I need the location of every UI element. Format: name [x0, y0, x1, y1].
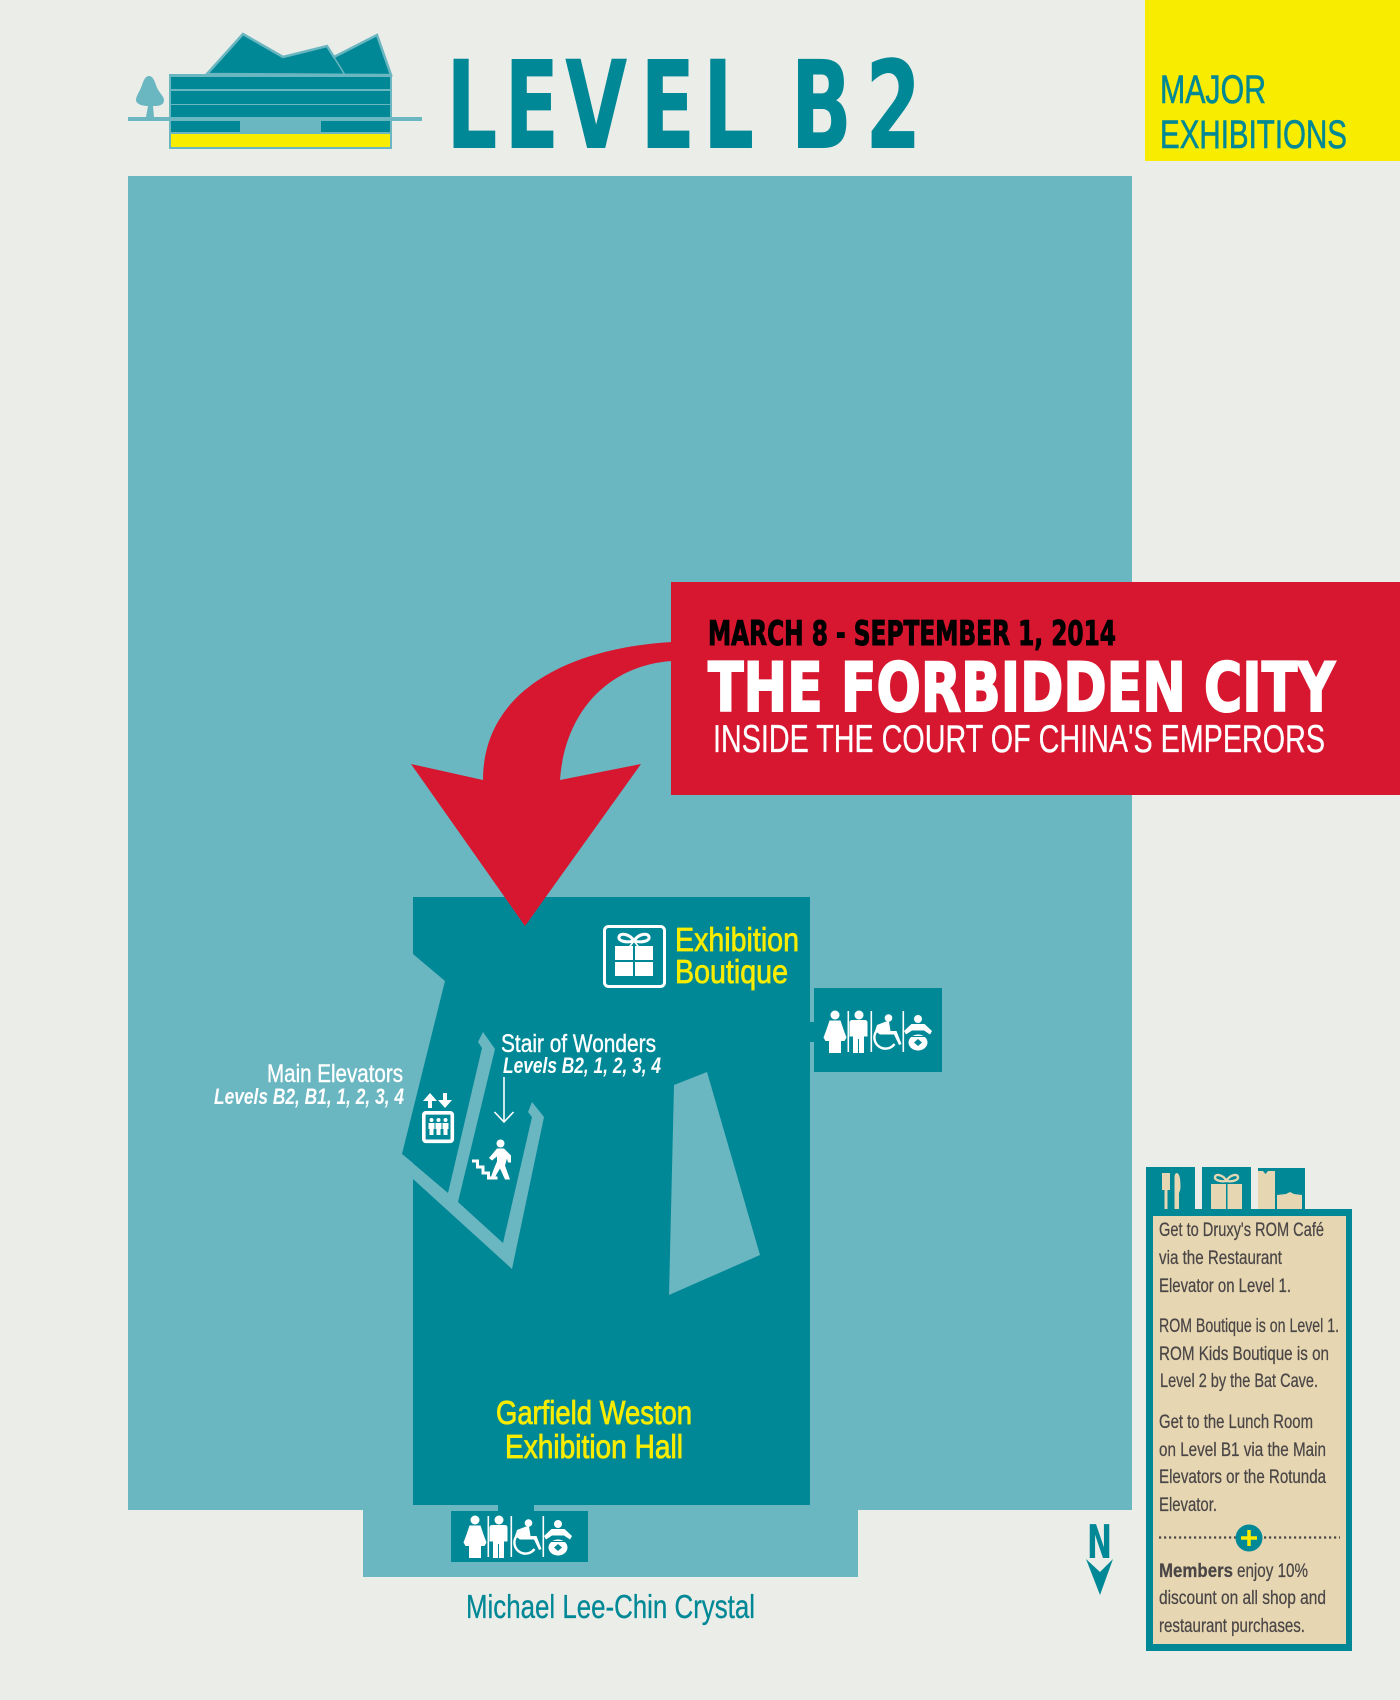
title: LEVEL B2: [446, 36, 921, 178]
label: michael lee-chin crystal: Michael Lee-Chin Crystal: [466, 1588, 755, 1625]
label: stair of wonders: Levels B2, 1, 2, 3, 4: [503, 1053, 661, 1078]
stair wall band: [402, 1032, 544, 1269]
panel: museum floor area: [128, 176, 1132, 1577]
icon: washrooms south: [451, 1511, 588, 1562]
label: stair of wonders: [501, 1030, 661, 1078]
heading: exhibition boutique: Exhibition: [675, 921, 799, 958]
callout: exhibition title: MARCH 8 - SEPTEMBER 1, 2014: [708, 614, 1116, 654]
panel: major exhibitions tag: [1145, 0, 1400, 161]
text: lunch room: Elevator.: [1159, 1495, 1217, 1516]
text: boutique: [1159, 1316, 1339, 1392]
heading: exhibition boutique: [675, 921, 799, 990]
icon: north arrow: [1086, 1515, 1113, 1595]
text: boutique: Level 2 by the Bat Cave.: [1160, 1371, 1318, 1392]
text: lunch room: [1159, 1412, 1326, 1516]
tab: shop: [1202, 1167, 1251, 1211]
label: main elevators: [214, 1060, 404, 1109]
text: members: enjoy 10%: [1237, 1561, 1308, 1582]
text: lunch room: on Level B1 via the Main: [1159, 1440, 1326, 1461]
label: garfield weston exhibition hall: Garfield Weston: [496, 1394, 692, 1431]
label: main elevators: Main Elevators: [267, 1060, 403, 1088]
icon: north arrow: N: [1087, 1515, 1112, 1569]
icon: washrooms east: [814, 988, 942, 1072]
text: members: [1159, 1561, 1326, 1637]
text: cafe: via the Restaurant: [1159, 1248, 1283, 1269]
text: members: Members: [1159, 1561, 1233, 1582]
label: stair of wonders: Stair of Wonders: [501, 1030, 656, 1058]
callout: exhibition title: [671, 582, 1400, 795]
panel: exhibition hall floor plan: [402, 897, 816, 1512]
tab: restaurant: [1146, 1167, 1195, 1211]
panel: major exhibitions tag: MAJOR: [1160, 68, 1266, 112]
panel: visitor information: [1146, 1167, 1352, 1651]
arrow: red curved pointer: [411, 642, 672, 926]
text: members: restaurant purchases.: [1159, 1616, 1305, 1637]
heading: exhibition boutique: Boutique: [675, 953, 788, 990]
text: cafe: [1159, 1220, 1324, 1297]
label: garfield weston exhibition hall: Exhibition Hall: [505, 1428, 683, 1465]
text: cafe: Get to Druxy's ROM Café: [1159, 1220, 1324, 1241]
atrium void: [669, 1072, 760, 1295]
text: members: discount on all shop and: [1159, 1588, 1326, 1609]
building icon: [128, 34, 422, 149]
text: boutique: ROM Boutique is on Level 1.: [1159, 1316, 1339, 1337]
icon: elevator: [423, 1093, 452, 1141]
divider with plus: [1159, 1524, 1340, 1552]
label: main elevators: Levels B2, B1, 1, 2, 3, 4: [214, 1084, 404, 1109]
text: lunch room: Get to the Lunch Room: [1159, 1412, 1313, 1433]
arrow: down to stair: [494, 1077, 514, 1122]
tab: lunch room: [1258, 1168, 1305, 1211]
text: boutique: ROM Kids Boutique is on: [1159, 1344, 1329, 1365]
icon: stair walker: [472, 1140, 511, 1180]
icon: gift: [604, 926, 664, 986]
label: garfield weston exhibition hall: [496, 1394, 692, 1465]
text: lunch room: Elevators or the Rotunda: [1159, 1467, 1326, 1488]
text: cafe: Elevator on Level 1.: [1159, 1276, 1291, 1297]
